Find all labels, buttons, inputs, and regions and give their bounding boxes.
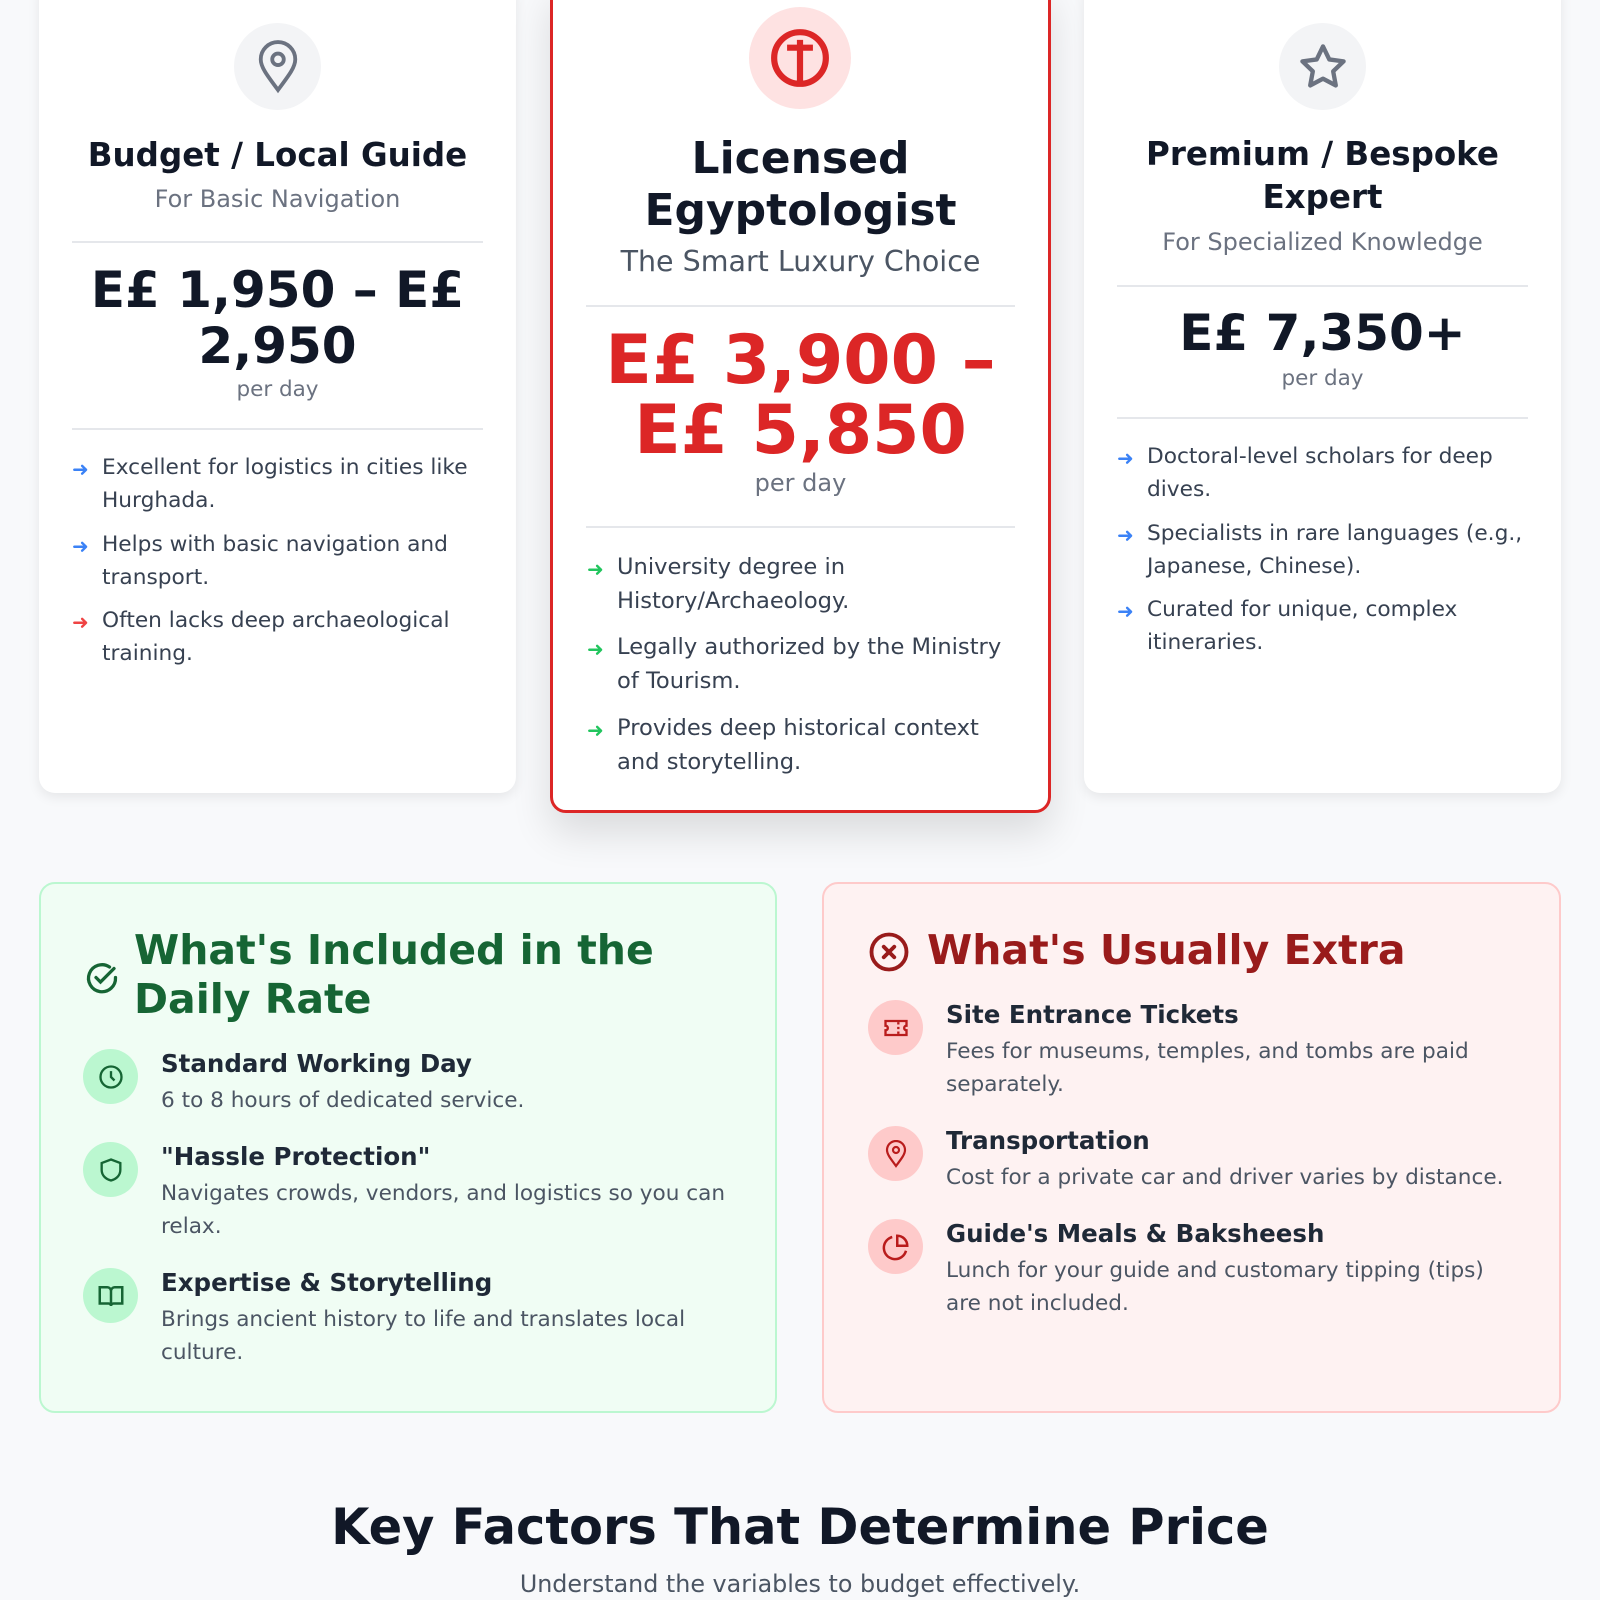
item: expertise: Expertise & Storytelling	[161, 1268, 492, 1297]
price	[605, 321, 996, 470]
subtitle: For Basic Navigation	[155, 185, 400, 213]
item: hassle protection: Navigates crowds, vendors, and logistics so you can relax.	[161, 1181, 725, 1239]
heading: premium title: Premium / Bespoke	[1146, 135, 1499, 173]
card: premium bespoke	[1084, 0, 1561, 793]
price: E£ 3,900 –	[605, 321, 996, 400]
item: expertise	[83, 1268, 685, 1365]
bullet list: Often lacks deep archaeological training.	[102, 608, 450, 666]
card: budget local guide: ➜	[72, 610, 89, 634]
icon: x circle	[870, 932, 908, 972]
bullet list: Helps with basic navigation and transport.	[102, 532, 448, 590]
icon: star	[1279, 23, 1366, 110]
bullet list	[587, 554, 1001, 775]
bullet list: Legally authorized by the Ministry of Tourism.	[617, 634, 1001, 694]
heading: key factors: Key Factors That Determine Price	[331, 1498, 1269, 1556]
icon: map pin	[234, 23, 321, 110]
heading: extras: What's Usually Extra	[927, 926, 1406, 974]
item: hassle protection: "Hassle Protection"	[161, 1142, 430, 1171]
heading: premium title	[1146, 135, 1499, 216]
item: transportation: Cost for a private car and driver varies by distance.	[946, 1165, 1503, 1190]
item: transportation: Transportation	[946, 1126, 1150, 1155]
card: licensed egyptologist	[550, 0, 1051, 813]
card: budget local guide: ➜	[72, 534, 89, 558]
icon: clock	[83, 1049, 138, 1104]
bullet list	[72, 455, 468, 666]
panel: included	[39, 882, 777, 1413]
heading: egyptologist: Licensed	[692, 133, 909, 184]
heading: included: What's Included in the	[134, 926, 654, 974]
card: licensed egyptologist: ➜	[587, 718, 604, 742]
bullet list: Doctoral-level scholars for deep dives.	[1147, 444, 1493, 502]
bullet list	[1117, 444, 1522, 655]
heading: included	[134, 926, 654, 1023]
card: licensed egyptologist: ➜	[587, 557, 604, 581]
bullet list: Curated for unique, complex itineraries.	[1147, 597, 1457, 655]
card: budget local guide: ➜	[72, 457, 89, 481]
price	[91, 261, 464, 375]
card: premium bespoke: ➜	[1117, 599, 1134, 623]
bullet list: University degree in History/Archaeology.	[617, 554, 849, 614]
card: licensed egyptologist: ➜	[587, 637, 604, 661]
item: working day	[83, 1049, 524, 1113]
icon: pie	[868, 1219, 923, 1274]
icon: ticket	[868, 1000, 923, 1055]
card: premium bespoke: ➜	[1117, 446, 1134, 470]
subtitle: key factors: Understand the variables to budget effectively.	[520, 1570, 1080, 1598]
price: E£ 7,350+	[1179, 304, 1466, 362]
item: meals	[868, 1219, 1484, 1316]
item: meals: Guide's Meals & Baksheesh	[946, 1219, 1324, 1248]
heading: included: Daily Rate	[134, 975, 371, 1023]
item: working day: Standard Working Day	[161, 1049, 472, 1078]
icon: ankh	[749, 7, 851, 109]
item: hassle protection	[83, 1142, 725, 1239]
item: tickets	[868, 1000, 1469, 1097]
item: tickets: Site Entrance Tickets	[946, 1000, 1239, 1029]
card: budget local guide	[39, 0, 516, 793]
item: meals: Lunch for your guide and customary tipping (tips) are not included.	[946, 1258, 1484, 1316]
item: working day: 6 to 8 hours of dedicated service.	[161, 1088, 524, 1113]
icon: pin	[868, 1126, 923, 1181]
icon: shield	[83, 1142, 138, 1197]
card: premium bespoke: ➜	[1117, 523, 1134, 547]
item: tickets: Fees for museums, temples, and tombs are paid separately.	[946, 1039, 1469, 1097]
item: transportation	[868, 1126, 1503, 1190]
heading: egyptologist	[644, 133, 957, 236]
price: E£ 5,850	[634, 391, 967, 470]
per day: per day	[1281, 366, 1364, 391]
bullet list: Provides deep historical context and storytelling.	[617, 715, 979, 775]
item: expertise: Brings ancient history to life and translates local culture.	[161, 1307, 685, 1365]
heading: egyptologist: Egyptologist	[644, 185, 957, 236]
panel: extras	[822, 882, 1561, 1413]
subtitle: For Specialized Knowledge	[1162, 228, 1483, 256]
subtitle: The Smart Luxury Choice	[621, 245, 980, 278]
bullet list: Specialists in rare languages (e.g., Japanese, Chinese).	[1147, 521, 1522, 579]
price: E£ 1,950 – E£	[91, 261, 464, 319]
heading: budget title: Budget / Local Guide	[88, 136, 467, 174]
bullet list: Excellent for logistics in cities like Hurghada.	[102, 455, 468, 513]
icon: book	[83, 1268, 138, 1323]
heading: premium title: Expert	[1262, 178, 1383, 216]
icon: check circle	[86, 963, 118, 994]
per day: per day	[236, 377, 319, 402]
per day: per day	[755, 469, 846, 497]
price: 2,950	[198, 317, 357, 375]
